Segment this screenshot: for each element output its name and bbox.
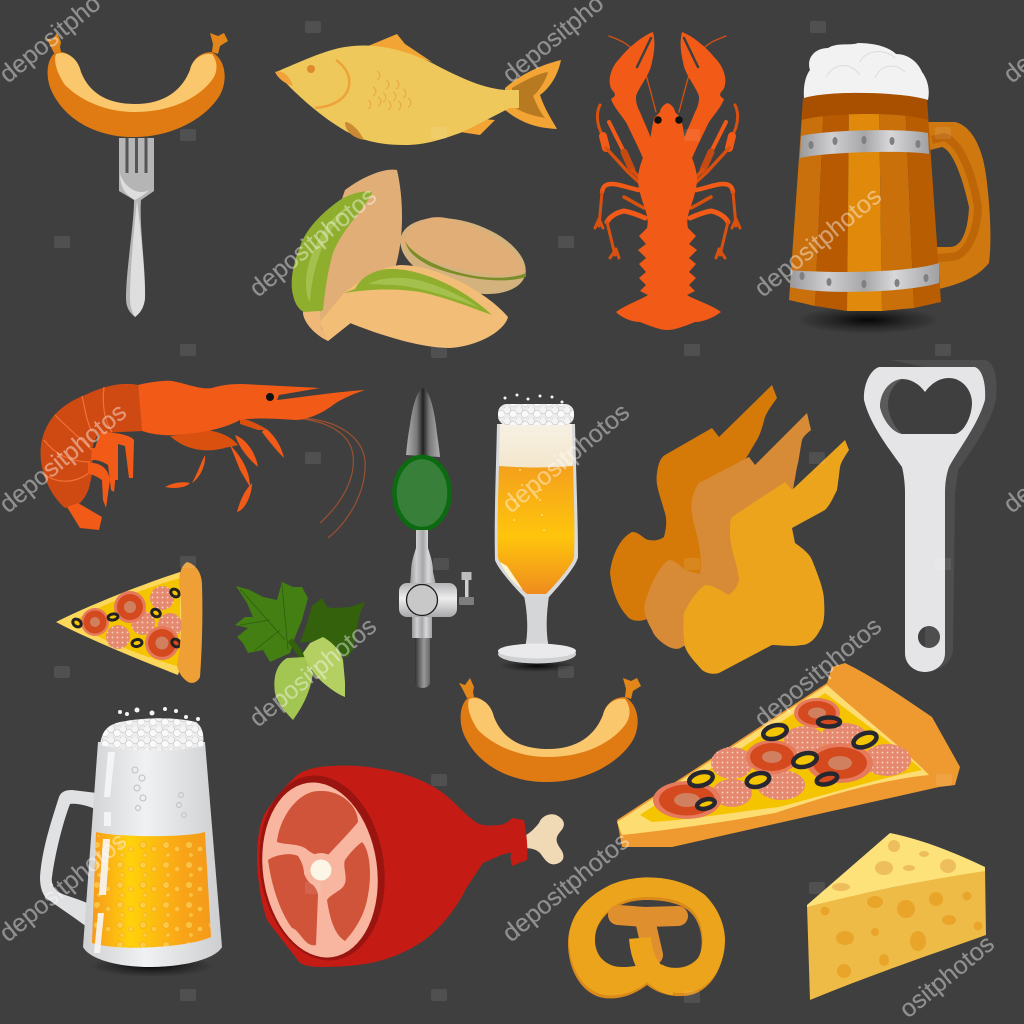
ham muscle left bbox=[268, 854, 318, 945]
icon: glass beer mug bbox=[40, 707, 222, 977]
pretzel crossing strand bbox=[640, 938, 675, 985]
fish tail bbox=[505, 60, 561, 129]
ham dark rim bbox=[248, 767, 396, 969]
pretzel twist bbox=[618, 915, 678, 955]
tap side lever bbox=[459, 572, 474, 605]
watermark: depositphotos text: depositphotos bbox=[244, 182, 382, 303]
tap body bbox=[399, 583, 457, 617]
dark hop leaf bbox=[300, 598, 365, 658]
icon: fish bbox=[275, 34, 561, 145]
hop stem bbox=[290, 640, 305, 660]
crayfish body bbox=[616, 103, 721, 330]
gill bbox=[315, 60, 349, 108]
beer highlight bbox=[500, 562, 523, 590]
icon: sausage bbox=[459, 678, 641, 782]
shrimp front legs bbox=[165, 418, 284, 512]
opener hole shade bbox=[880, 379, 902, 434]
icon: cheese wedge bbox=[807, 833, 986, 1000]
pizza sauce bbox=[640, 693, 922, 822]
mug glass bbox=[83, 742, 222, 967]
tap lower body bbox=[412, 617, 432, 638]
opener shadow bbox=[890, 360, 997, 672]
small pizza pepperoni bbox=[81, 591, 179, 660]
small pizza olives bbox=[71, 588, 182, 648]
beer in glass bbox=[498, 466, 574, 594]
icon: hop leaves and cones bbox=[235, 582, 365, 720]
icon: ham bbox=[248, 765, 564, 969]
tap collar bbox=[410, 530, 436, 585]
ham bone centre bbox=[304, 853, 338, 887]
hop leaf veins bbox=[240, 585, 288, 650]
icon: sausage on a fork bbox=[46, 33, 228, 317]
icon: wooden stein bbox=[789, 43, 990, 334]
fork bbox=[119, 138, 154, 317]
small pizza salami bbox=[106, 586, 182, 649]
shrimp tail fan bbox=[67, 503, 102, 530]
mug foam bbox=[100, 707, 203, 750]
hop cone left bbox=[274, 657, 313, 720]
icon: roast chicken bbox=[610, 385, 849, 674]
chicken middle layer bbox=[644, 413, 811, 649]
sausage bbox=[46, 33, 228, 137]
tap dial bbox=[406, 584, 438, 616]
icon: beer tap bbox=[394, 388, 474, 688]
crayfish eyes bbox=[654, 116, 683, 124]
stein lower metal band bbox=[790, 263, 939, 292]
icon: pretzel bbox=[568, 877, 725, 998]
tap green knob bbox=[394, 457, 450, 529]
stein shadow bbox=[796, 306, 940, 334]
cream head bbox=[499, 424, 573, 468]
shrimp eye bbox=[266, 393, 274, 401]
stein body bbox=[789, 100, 824, 306]
mug highlights bbox=[94, 752, 115, 953]
dorsal fin bbox=[368, 34, 432, 62]
icon: beer glass bbox=[495, 394, 578, 672]
green kernel bbox=[292, 191, 372, 313]
back pistachio bbox=[391, 204, 535, 308]
small pizza sauce bbox=[72, 578, 180, 667]
tap handle bbox=[406, 388, 440, 457]
watermark: depositphotos text: depositphotos bbox=[497, 827, 635, 948]
ham muscle top bbox=[277, 791, 358, 856]
stein upper metal band bbox=[800, 130, 929, 158]
watermark: depositphotos text: depositphotos bbox=[749, 182, 887, 303]
mug beer bbox=[92, 832, 211, 948]
stein rim band bbox=[802, 92, 928, 120]
opener body bbox=[864, 367, 985, 672]
icon: pistachios bbox=[292, 170, 535, 348]
pizza olives bbox=[688, 718, 878, 811]
small pizza crust bbox=[177, 562, 202, 683]
pizza crust bbox=[617, 663, 960, 847]
icon: small pizza slice bbox=[56, 562, 202, 683]
glass bowl bbox=[495, 424, 578, 597]
cheese side bbox=[807, 868, 986, 1000]
belly fin bbox=[460, 118, 495, 135]
glass foam bbox=[498, 394, 574, 425]
glass shadow bbox=[499, 660, 575, 672]
pectoral fin bbox=[345, 122, 364, 140]
icon: shrimp bbox=[41, 381, 365, 538]
icon: bottle opener bbox=[864, 360, 997, 672]
chicken front layer bbox=[683, 440, 849, 674]
pretzel shadow bbox=[568, 880, 724, 998]
green hop leaf bbox=[235, 582, 308, 662]
icon: large pizza slice bbox=[617, 663, 960, 847]
small pizza base bbox=[56, 572, 195, 675]
watermark: depositphotos text: depositphotos bbox=[244, 612, 382, 733]
cheese front holes bbox=[820, 892, 982, 978]
shrimp head bbox=[138, 381, 365, 435]
cheese top bbox=[807, 833, 985, 907]
pizza pepperoni bbox=[653, 698, 873, 819]
ham muscle right bbox=[327, 842, 370, 941]
ham bone bbox=[520, 814, 564, 864]
rising bubbles bbox=[513, 469, 545, 531]
watermark: depositphotos text: ositphotos bbox=[894, 930, 1000, 1024]
hop cone right bbox=[303, 637, 345, 697]
glass stem and foot bbox=[498, 596, 576, 664]
shrimp tail body bbox=[41, 384, 142, 508]
stein handle bbox=[925, 122, 990, 290]
scales bbox=[368, 71, 411, 110]
pizza cheese bbox=[617, 685, 929, 835]
ham meat bbox=[257, 765, 527, 967]
mug handle bbox=[40, 790, 97, 927]
pizza salami bbox=[711, 723, 911, 807]
fish mouth bbox=[275, 71, 293, 86]
icon: crayfish bbox=[595, 32, 740, 330]
tap spout bbox=[415, 638, 430, 688]
cheese top holes bbox=[832, 840, 956, 891]
opener hole background bbox=[880, 378, 972, 434]
open pistachio bbox=[292, 170, 402, 341]
pretzel ring bbox=[569, 877, 725, 995]
mug shadow bbox=[90, 955, 214, 977]
crayfish legs bbox=[595, 36, 740, 258]
watermark: depositphotos text: depositphotos bbox=[497, 398, 635, 519]
chicken back layer bbox=[610, 385, 777, 621]
shrimp segment lines bbox=[44, 387, 112, 481]
mug rising bubbles bbox=[132, 767, 186, 818]
crayfish claws bbox=[610, 32, 725, 170]
watermark: depositphotos text: depositphotos bbox=[749, 612, 887, 733]
fish body bbox=[276, 45, 519, 145]
shrimp swimming legs bbox=[88, 432, 134, 508]
front pistachio bbox=[320, 265, 508, 348]
fish eye bbox=[307, 65, 315, 73]
stein foam bbox=[804, 43, 929, 100]
ham slice bbox=[251, 775, 389, 965]
shrimp antennae bbox=[293, 418, 365, 538]
